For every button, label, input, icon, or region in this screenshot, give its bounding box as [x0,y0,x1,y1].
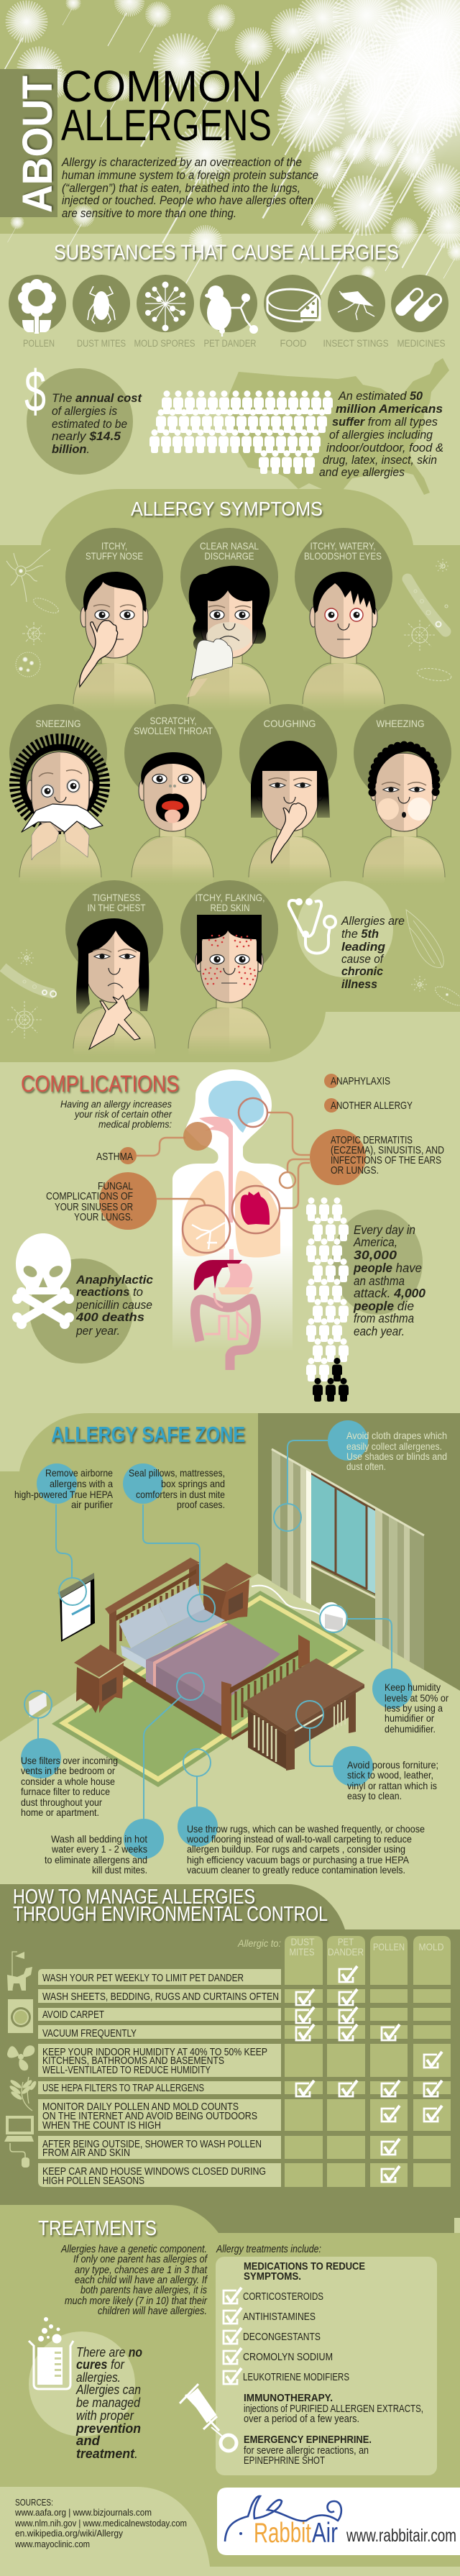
labels: symptoms: SCRATCHY, [150,715,197,726]
panel: treatment list: EMERGENCY EPINEPHRINE. [244,2434,372,2446]
labels: symptoms: IN THE CHEST [88,902,146,913]
strip at right edge [454,2218,460,2233]
table rows: KITCHENS, BATHROOMS AND BASEMENTS [42,2055,224,2067]
icon: dust mite [73,275,130,332]
table header: Allergic to: [237,1937,281,1949]
text: fifty million americans: of allergies including [329,429,433,442]
labels: complications: ASTHMA [96,1151,133,1163]
text: fifty million americans: and eye allergies [319,466,405,479]
rug [52,1591,364,1787]
text: fifty million americans: drug, latex, insect, skin [323,454,437,467]
tips: safe zone text: wood flooring instead of wall-to-wall carpeting to reduce [186,1833,412,1845]
labels: complications: COMPLICATIONS OF [46,1191,133,1202]
icon: food cheese [264,275,321,332]
callout: fifth leading cause: illness [341,977,377,991]
table rows: WHEN THE COUNT IS HIGH [42,2119,161,2132]
callout: asthma statistics: attack. 4,000 [354,1286,426,1300]
callout: fifth leading cause: cause of [341,952,385,966]
blue info dots [21,1420,413,1859]
labels: symptoms: TIGHTNESS [92,892,141,903]
callout: no cures: prevention [75,2421,141,2436]
text: genetic component: much more likely (7 in 10) that their [65,2296,208,2307]
intro paragraph: (“allergen”) that is eaten, breathed into the lungs, [62,182,300,195]
tips: safe zone text: high-powered True HEPA [14,1489,114,1500]
check marks [296,1966,442,2182]
callout: anaphylactic reactions: penicillin cause [75,1298,152,1312]
tips: safe zone text: proof cases. [177,1499,225,1510]
labels: substance names: FOOD [280,337,306,349]
bed [74,1558,364,1771]
labels: symptoms [36,540,424,913]
panel: sources [0,2487,210,2576]
icon: shower and dog [7,1952,32,1991]
callout: asthma statistics: each year. [354,1324,405,1338]
labels: complications: FUNGAL [98,1181,133,1192]
panel: safe zone room [0,1413,460,1899]
labels: substance names [23,337,446,349]
decorations: bacteria and viruses [3,549,460,1038]
icon: fan [7,2045,34,2070]
table header: MOLD [418,1941,444,1952]
icon: washer [8,1999,33,2033]
labels: symptoms: WHEEZING [377,718,424,729]
heading: complications: COMPLICATIONS [21,1071,179,1097]
tips: safe zone text: allergens with a [50,1478,113,1489]
text: fifty million americans: An estimated 50 [338,390,423,403]
face: sneezing [17,741,103,885]
panel: annual cost: $ [24,359,46,424]
table rows: VACUUM FREQUENTLY [42,2027,137,2040]
small wall vent [29,1691,47,1717]
logo: rabbit air: Rabbit [254,2518,311,2549]
labels: complications: OR LUNGS. [331,1165,379,1177]
tips: safe zone text: Seal pillows, mattresses, [129,1467,225,1479]
window and curtains [272,1449,424,1679]
callout: anaphylactic reactions: 400 deaths [75,1310,144,1324]
callout: anaphylactic reactions: per year. [75,1324,120,1338]
tips: safe zone text: Avoid cloth drapes which [346,1430,447,1441]
target rings and connector lines [24,1440,392,1819]
title: common allergens [61,62,272,150]
face: tightness in the chest [73,918,155,1056]
panel: sources: www.aafa.org | www.bizjournals.com [14,2507,152,2518]
map: united states [229,358,449,503]
labels: complications: YOUR SINUSES OR [55,1202,133,1213]
tips: safe zone text: Remove airborne [45,1467,113,1479]
tips: safe zone text: vacuum cleaner to greatly reduce contamination levels. [187,1864,405,1876]
text: complications intro: Having an allergy increases [60,1098,172,1110]
panel: treatments background [0,2205,460,2576]
text: genetic component: Allergies have a genetic component. [60,2244,207,2255]
tips: safe zone text: Use filters over incoming [21,1755,118,1766]
title: common allergens: COMMON [61,62,262,111]
tips: safe zone text: easily collect allergenes. [346,1440,442,1452]
table rows: WELL-VENTILATED TO REDUCE HUMIDITY [42,2064,211,2076]
heading: how to manage allergies: THROUGH ENVIRONMENTAL CONTROL [13,1903,328,1926]
tips: safe zone text: vents in the bedroom or [21,1765,115,1776]
intro paragraph: are sensitive to more than one thing. [62,207,236,220]
table header: DANDER [328,1946,364,1958]
panel: treatment list: CROMOLYN SODIUM [243,2351,333,2363]
panel: treatment list: MEDICATIONS TO REDUCE [244,2260,365,2273]
labels: substance names: INSECT STINGS [323,337,388,349]
table rows: MONITOR DAILY POLLEN AND MOLD COUNTS [42,2101,239,2113]
icon: wheat [9,2077,37,2111]
face: itchy stuffy nose [73,572,155,712]
panel: annual cost: nearly $14.5 [52,430,121,443]
labels: symptoms: ITCHY, WATERY, [310,540,375,552]
panel: sources: www.nlm.nih.gov | www.medicalnewstoday.com [14,2518,187,2529]
intro paragraph: injected or touched. People who have allergies often [62,194,313,207]
panel: treatment list: LEUKOTRIENE MODIFIERS [243,2371,349,2383]
text: complications intro: your risk of certain other [74,1108,172,1120]
table rows: HIGH POLLEN SEASONS [42,2175,144,2187]
halos: symptom circles [9,528,451,978]
orange target dots [99,1074,366,1230]
panel: sources: www.mayoclinic.com [14,2539,90,2549]
panel: treatment list: ANTIHISTAMINES [243,2311,316,2323]
callout: anaphylactic reactions [12,1233,154,1364]
heading: allergy safe zone: ALLERGY SAFE ZONE [51,1422,245,1447]
callout: asthma statistics: 30,000 [354,1248,397,1262]
table rows: FROM AIR AND SKIN [42,2147,130,2159]
tips: safe zone text: box springs and [161,1478,225,1489]
callout: asthma statistics: people die [353,1299,414,1313]
table header: MITES [289,1946,315,1958]
table rows: WASH SHEETS, BEDDING, RUGS AND CURTAINS OFTEN [42,1991,279,2003]
callout: asthma statistics [306,1197,426,1402]
text: treatments include: Allergy treatments include: [216,2244,321,2255]
tips: safe zone text: air purifier [71,1499,113,1510]
labels: symptoms: SNEEZING [36,718,80,729]
heading: how to manage allergies [13,1886,328,1926]
labels: substance names: DUST MITES [77,337,126,349]
tips: safe zone text: consider a whole house [21,1776,115,1787]
wall vent panel [58,1573,95,1642]
intro paragraph [61,156,318,220]
panel: treatment list [216,2257,437,2475]
callout: no cures: There are no [76,2345,142,2360]
face: itchy flaking red skin [188,915,270,1056]
labels: complications: ATOPIC DERMATITIS [331,1135,413,1146]
callout: asthma statistics: an asthma [354,1274,405,1288]
text: fifty million americans: million Americans [336,403,443,416]
icon: pet dander poodle [200,275,258,337]
tips: safe zone text: stick to wood, leather, [347,1769,433,1781]
panel: environmental control [0,1884,460,2233]
tips: safe zone text: furnace filter to reduce [21,1786,110,1797]
tips: safe zone text: water every 1 - 2 weeks [51,1843,147,1855]
labels: symptoms: ITCHY, [101,540,127,552]
callout: asthma statistics: from asthma [354,1311,414,1325]
icon: mold spores [137,275,194,332]
panel: annual cost: estimated to be [52,418,127,431]
icon: pollen [9,275,66,334]
callout: no cures: allergies. [76,2370,121,2385]
labels: symptoms: CLEAR NASAL [200,540,259,552]
callout: anaphylactic reactions: Anaphylactic [75,1273,154,1287]
callout: no cures: cures for [76,2357,125,2372]
tips: safe zone text: dust often. [346,1461,386,1472]
humidifier [252,1586,346,1632]
body diagram [172,1069,293,1370]
tips: safe zone text: humidifier or [385,1712,434,1724]
table rows [38,1969,281,2187]
intro paragraph: human immune system to a foreign protein substance [62,169,318,182]
tips: safe zone text: less by using a [385,1702,443,1714]
tips: safe zone text: kill dust mites. [92,1864,147,1876]
panel: symptoms background [0,489,460,1062]
intro paragraph: Allergy is characterized by an overreaction of the [61,156,302,169]
labels: symptoms: STUFFY NOSE [86,550,143,562]
labels: substance names: POLLEN [23,337,55,349]
title: common allergens: ALLERGENS [61,101,272,150]
tips: safe zone text: easy to clean. [347,1790,402,1801]
table header: POLLEN [373,1941,405,1952]
icon: syringe [180,2384,236,2451]
panel: about side strip [0,69,58,217]
callout: fifth leading cause: chronic [341,964,384,978]
face: scratchy swollen throat [132,752,213,885]
table rows: USE HEPA FILTERS TO TRAP ALLERGENS [42,2082,204,2094]
text: genetic component: any type, chances are 1 in 3 that [75,2265,208,2276]
callout: asthma statistics: America, [353,1235,397,1249]
text: genetic component [60,2244,208,2317]
icon: insect stings mosquito [328,275,385,332]
labels: complications: ANAPHYLAXIS [331,1076,390,1087]
face: wheezing [363,744,445,885]
callout: no cures: and [76,2434,101,2448]
heading: how to manage allergies: HOW TO MANAGE ALLERGIES [13,1886,255,1909]
dandelion pollen background [0,0,460,295]
callout: no cures: be managed [76,2395,141,2410]
face: clear nasal discharge [186,566,270,712]
panel: annual cost [24,359,143,475]
panel: annual cost: of allergies is [52,405,117,418]
panel: treatment list: IMMUNOTHERAPY. [244,2392,333,2404]
table rows: KEEP YOUR INDOOR HUMIDITY AT 40% TO 50% KEEP [42,2046,267,2058]
labels: complications [46,1076,444,1223]
tips: safe zone text: dehumidifier. [385,1723,436,1735]
text: genetic component: both parents have allergies, it is [80,2285,207,2296]
callout: no cures: Allergies can [75,2383,141,2397]
table header: PET [338,1936,354,1947]
table header [237,1936,451,1985]
panel: treatment list: CORTICOSTEROIDS [243,2290,323,2303]
panel: treatment list: DECONGESTANTS [243,2331,321,2343]
callout: asthma statistics: Every day in [354,1223,415,1237]
callout: fifth leading cause [289,881,405,991]
labels: symptoms: SWOLLEN THROAT [134,725,213,736]
labels: complications: YOUR LUNGS. [74,1212,133,1223]
tips: safe zone text: Wash all bedding in hot [51,1833,147,1845]
text: fifty million americans [319,390,443,479]
icon: medicines pills [391,275,448,332]
panel: annual cost: The annual cost [52,392,143,405]
panel: treatment list: EPINEPHRINE SHOT [244,2454,325,2467]
callout: no cures: treatment. [76,2447,138,2461]
people pictogram: 50 million [150,390,333,474]
table cells [285,1989,451,2187]
heading: ABOUT: ABOUT [14,76,61,213]
panel: sources: en.wikipedia.org/wiki/Allergy [15,2528,123,2539]
callout: no cures: with proper [76,2408,134,2423]
tips: safe zone text: Keep humidity [385,1681,441,1693]
table rows: AVOID CARPET [42,2009,104,2021]
face: itchy watery bloodshot eyes [303,572,385,712]
panel: treatment list: for severe allergic reactions, an [244,2444,369,2457]
tips: safe zone text: levels at 50% or [385,1692,448,1704]
tips: safe zone text: dust throughout your [21,1796,102,1808]
logo: rabbit air [217,2488,460,2555]
tips: safe zone text: Avoid porous forniture; [347,1759,438,1771]
table rows: KEEP CAR AND HOUSE WINDOWS CLOSED DURING [42,2165,266,2178]
text: complications intro [60,1098,172,1130]
table rows: WASH YOUR PET WEEKLY TO LIMIT PET DANDER [42,1972,244,1984]
tips: safe zone text: allergen buildup. For rugs and carpets , consider using [187,1843,405,1855]
tips: safe zone text: high efficiency vacuum bags or purchasing a true HEPA [187,1854,410,1865]
heading: substances that cause allergies: SUBSTANCES THAT CAUSE ALLERGIES [54,241,399,265]
panel: annual cost: billion. [52,443,90,456]
text: fifty million americans: indoor/outdoor, food & [326,442,443,455]
heading: treatments: TREATMENTS [38,2217,157,2240]
callout: no cures [29,2317,142,2461]
logo: rabbit air: Air [312,2518,338,2549]
labels: complications: ANOTHER ALLERGY [331,1100,413,1112]
text: genetic component: If only one parent has allergies of [73,2254,208,2265]
labels: substance names: MEDICINES [397,337,446,349]
icon: computer [4,2116,34,2168]
text: complications intro: medical problems: [98,1118,172,1130]
text: fifty million americans: suffer from all types [332,416,438,429]
face: coughing [249,741,331,885]
labels: symptoms: RED SKIN [210,902,250,913]
callout: fifth leading cause: leading [341,940,386,954]
panel: treatment list: over a period of a few years. [244,2413,359,2425]
labels: symptoms: ITCHY, FLAKING, [196,892,264,903]
bench table [242,1658,364,1771]
callout: fifth leading cause: Allergies are [341,914,405,928]
labels: substance names: PET DANDER [204,337,256,349]
table rows: ON THE INTERNET AND AVOID BEING OUTDOORS [42,2110,257,2122]
table rows: AFTER BEING OUTSIDE, SHOWER TO WASH POLLEN [42,2138,262,2150]
heading: allergy symptoms: ALLERGY SYMPTOMS [131,498,323,520]
callout: asthma statistics: people have [353,1261,422,1275]
tips: safe zone text: vinyl or rattan which is [347,1780,437,1791]
labels: symptoms: BLOODSHOT EYES [304,550,382,562]
right nightstand [201,1563,252,1622]
callout: anaphylactic reactions: reactions to [76,1285,143,1299]
tips: safe zone text: Use throw rugs, which can be washed frequently, or choose [187,1823,425,1835]
labels: substance names: MOLD SPORES [134,337,196,349]
panel: sources: SOURCES: [15,2497,53,2508]
labels: symptoms: COUGHING [263,718,316,729]
icons: household column [4,1952,37,2168]
tips: safe zone text: to eliminate allergens and [45,1854,147,1865]
connector lines and target circles [137,1098,310,1253]
left nightstand [74,1645,126,1713]
tips: safe zone text: home or apartment. [21,1807,99,1818]
callout: fifth leading cause: the 5th [341,927,379,941]
tips: safe zone text: Use shades or blinds and [346,1451,447,1462]
tips: safe zone text: comforters in dust mite [136,1489,225,1500]
labels: symptoms: DISCHARGE [204,550,254,562]
panel: treatment list: SYMPTOMS. [244,2270,301,2283]
tips: safe zone text [14,1430,448,1876]
table header: DUST [290,1936,315,1947]
text: genetic component: each child will have an allergy. If [75,2275,208,2286]
text: genetic component: children will have allergies. [98,2306,207,2317]
